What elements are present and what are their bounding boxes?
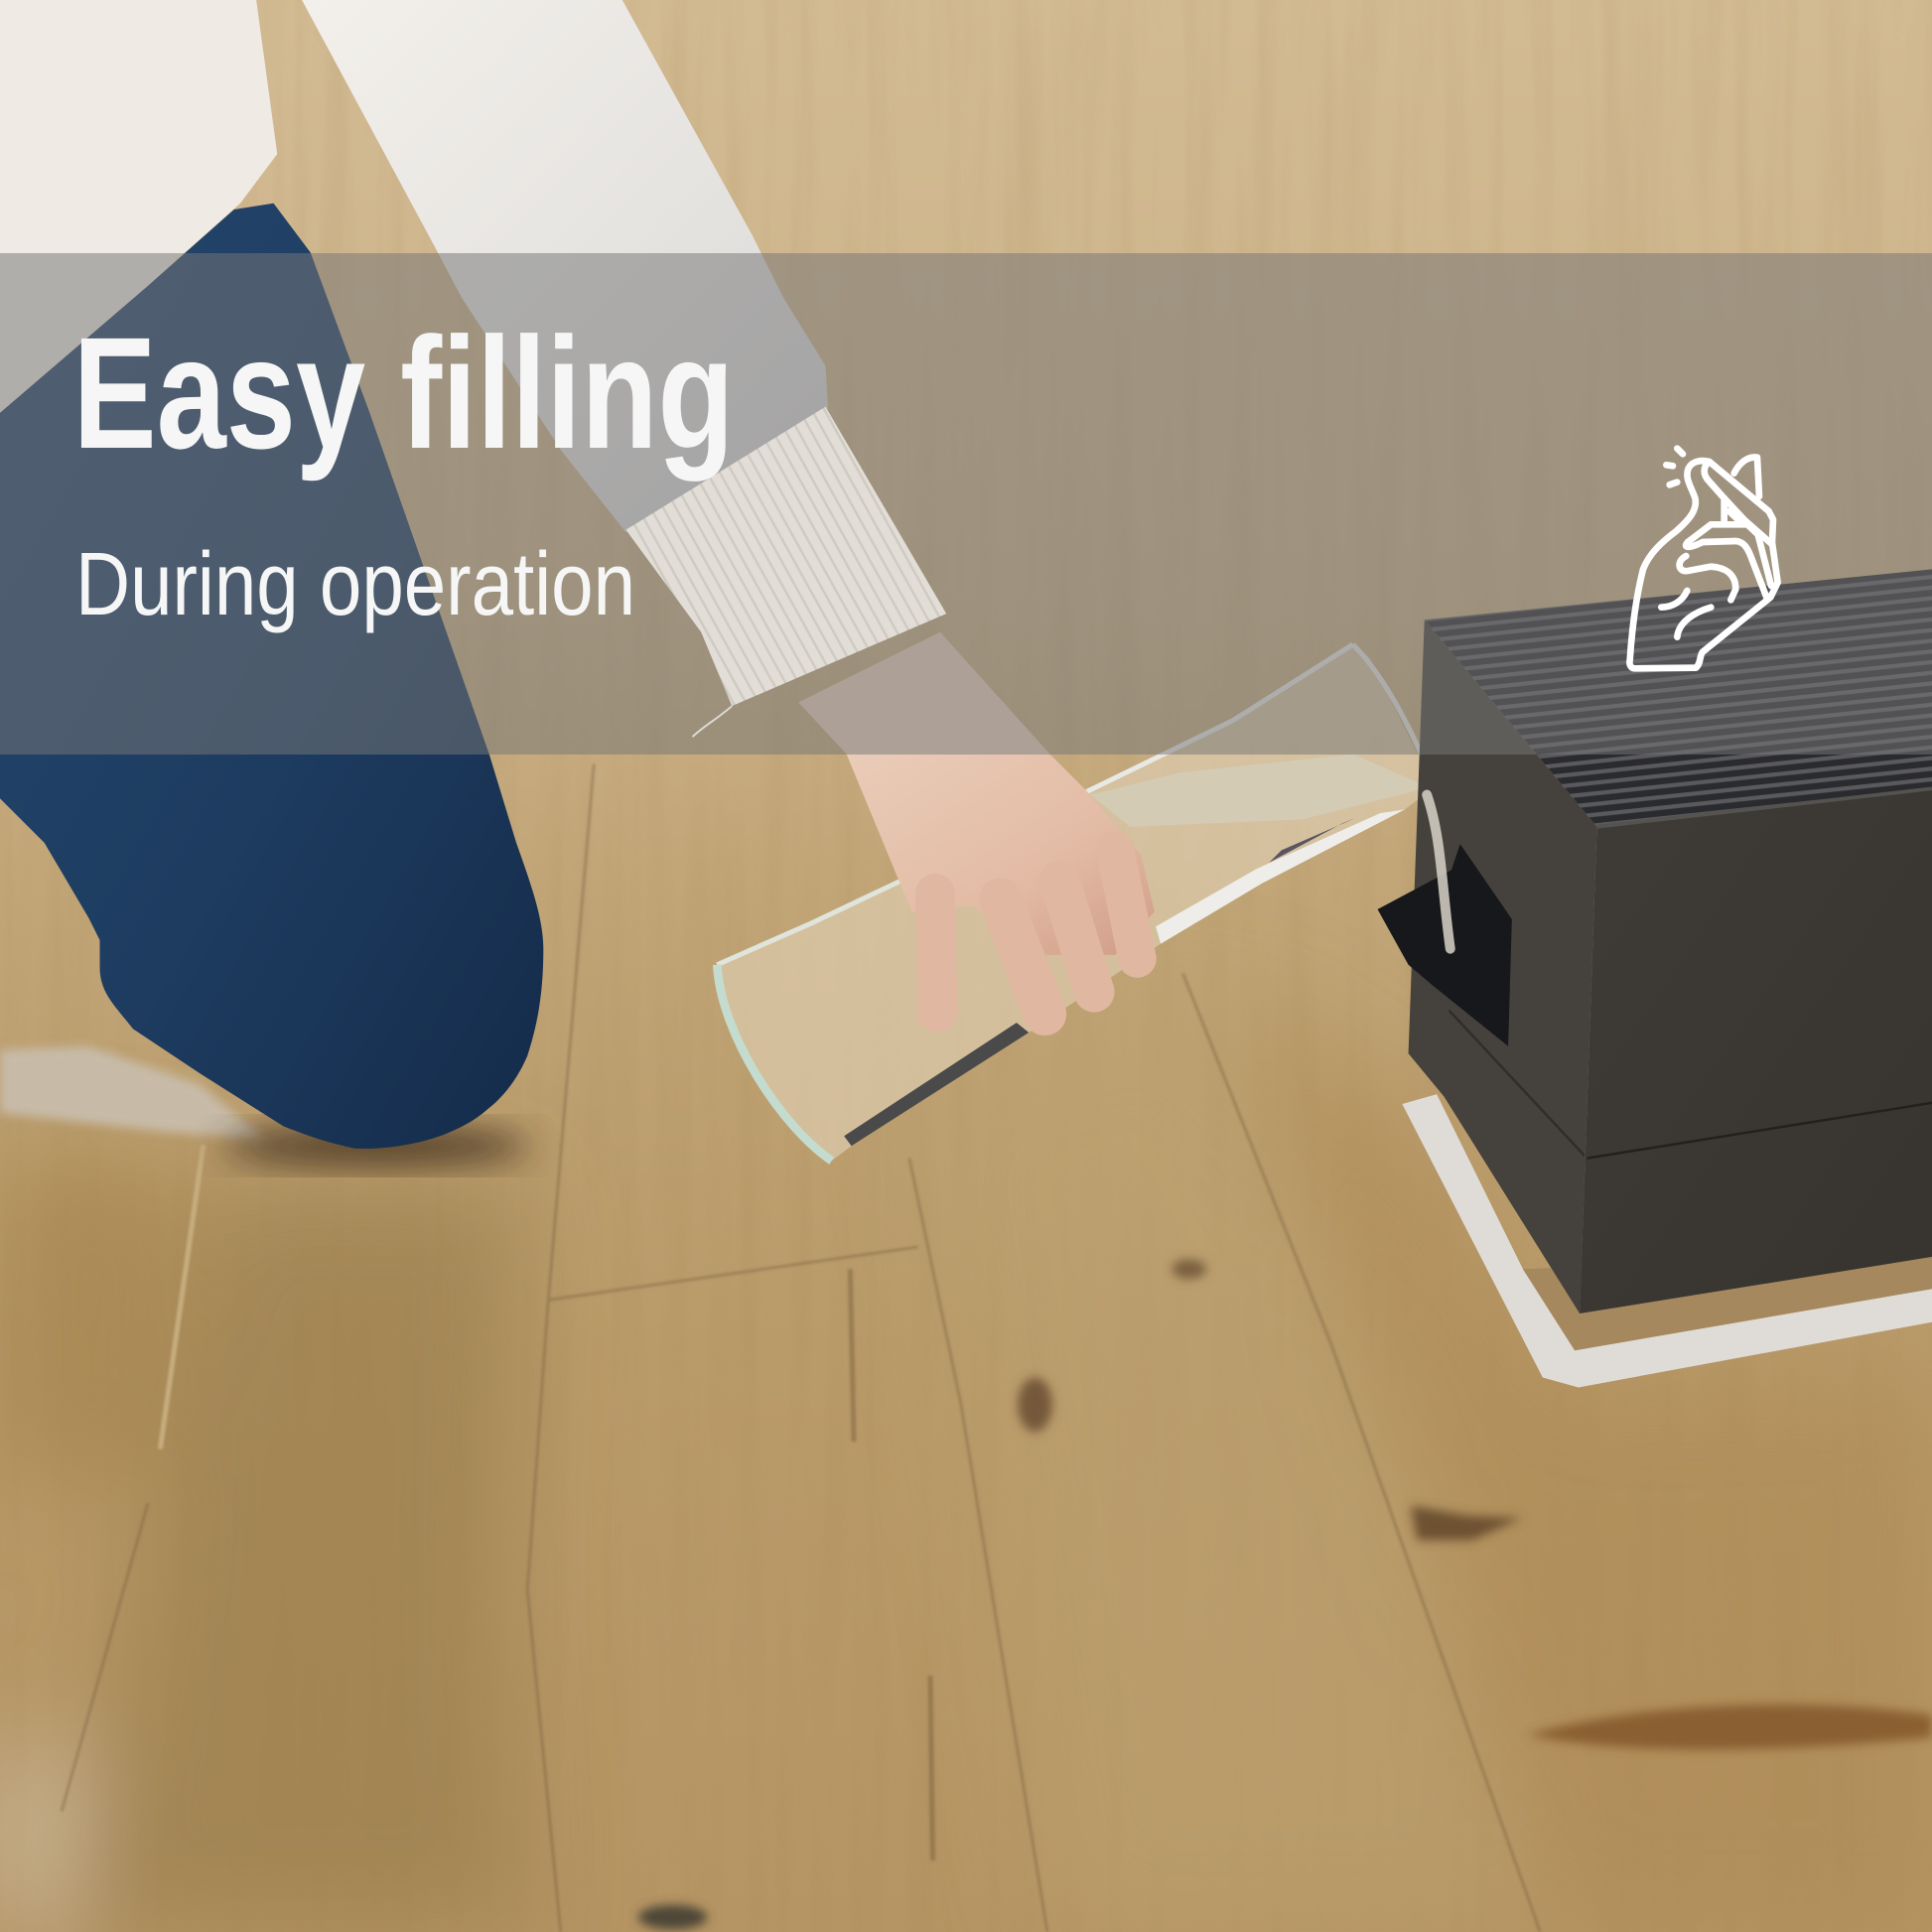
- subtitle: During operation: [75, 535, 635, 634]
- icon: crossed fingers / snapping hand: [1629, 449, 1778, 668]
- translucent grey title band: [0, 253, 1932, 755]
- floor reflection and shadow under the knee: [0, 1046, 530, 1166]
- wood visible under the humidifier: [1523, 1251, 1932, 1350]
- sweater cuff (bright, above the band tint): [625, 407, 946, 737]
- person: sweater sleeve: [302, 0, 828, 532]
- humidifier white base tray: [1402, 1094, 1932, 1387]
- person: hand over carafe: [847, 755, 1155, 1014]
- humidifier body: [1409, 569, 1932, 1313]
- title: Easy filling: [73, 304, 735, 482]
- person: wrist behind glass: [798, 632, 1049, 755]
- water stream: [1427, 795, 1450, 949]
- person: jeans: [0, 204, 543, 1149]
- humidifier filling flap: [1378, 844, 1512, 1046]
- glass carafe with water: [717, 644, 1435, 1161]
- person: sweater torso: [0, 0, 277, 413]
